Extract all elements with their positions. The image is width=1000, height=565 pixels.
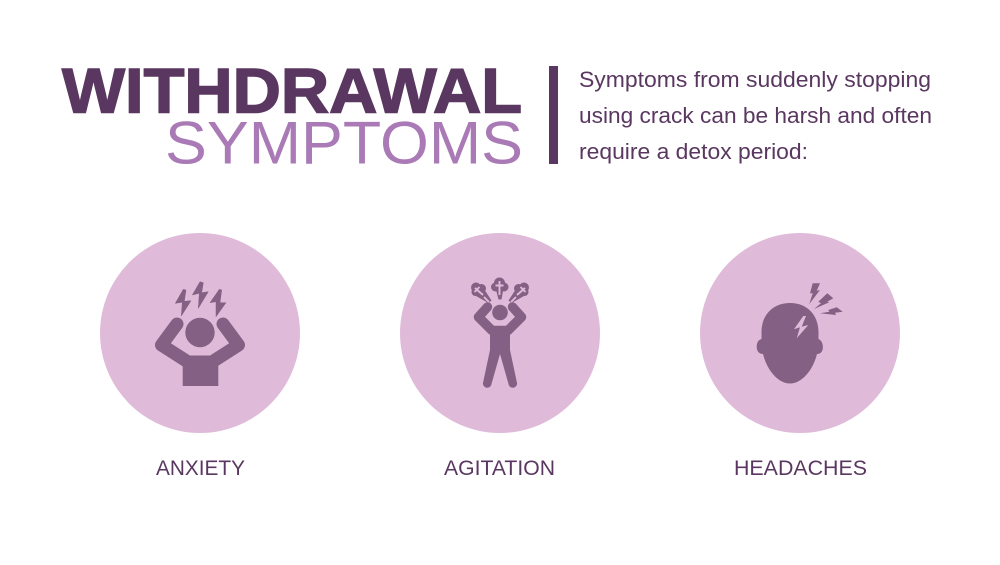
agitation circle [400,233,600,433]
label: agitation: AGITATION [444,456,555,480]
label: anxiety: ANXIETY [156,456,245,480]
headaches circle [700,233,900,433]
panel: agitation [400,233,600,480]
icon: lightning in head [794,316,808,338]
intro text: require a detox period: [579,139,808,164]
panel: anxiety [100,233,300,480]
intro text: Symptoms from suddenly stopping [579,67,931,92]
icon: steam clouds [471,278,529,303]
title divider bar [549,66,558,164]
label: headaches: HEADACHES [734,456,867,480]
icon: aching head [757,283,843,384]
icon: stress bolts [175,282,226,317]
panel: headaches [700,233,900,480]
intro text [579,67,932,164]
icon: outer bolts [809,283,843,315]
title line: withdrawal: WITHDRAWAL [62,56,522,126]
icon: anxious person [162,282,238,386]
icon: agitated person [471,278,529,388]
title [62,56,523,176]
intro text: using crack can be harsh and often [579,103,932,128]
anxiety circle [100,233,300,433]
title line: symptoms: SYMPTOMS [165,110,523,176]
